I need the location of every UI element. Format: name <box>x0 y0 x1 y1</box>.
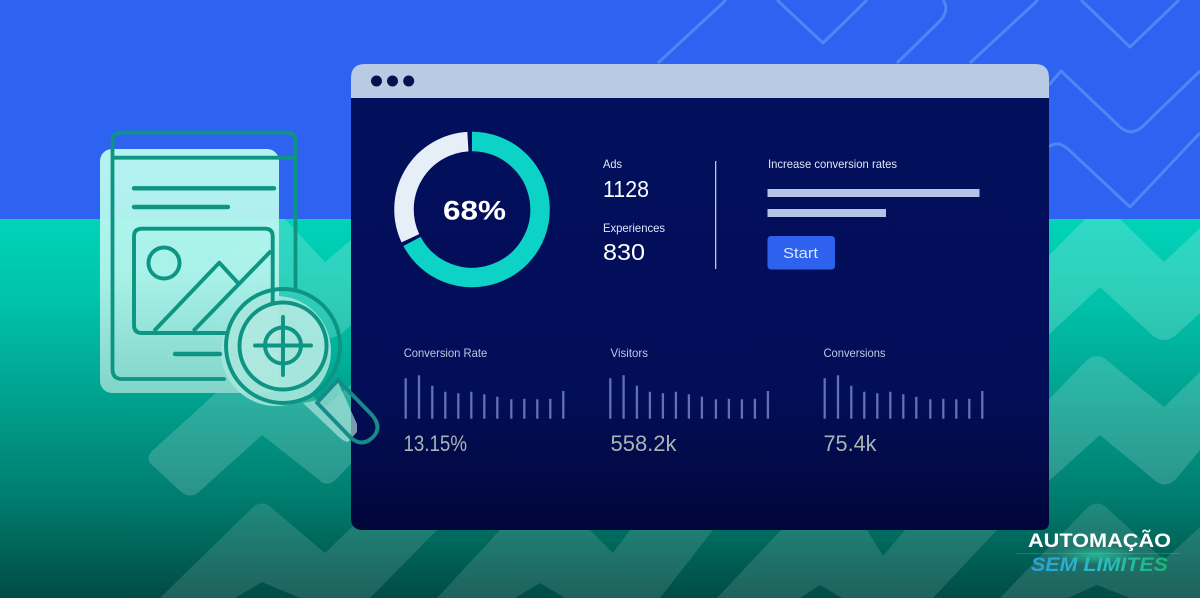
donut chart: 68%: 68% <box>443 196 506 226</box>
document light card <box>100 149 279 393</box>
pattern: teal chevron bands <box>148 219 1200 598</box>
magnifier light backing <box>221 296 331 406</box>
stat: experiences <box>603 221 665 265</box>
window body <box>351 90 1049 530</box>
icon: document with image under magnifier <box>100 132 378 442</box>
background: blue upper half <box>0 0 1200 220</box>
document text lines <box>134 188 274 354</box>
magnifier handle light backing <box>303 380 357 442</box>
window control dots <box>371 76 414 86</box>
stat: ads: Ads <box>603 157 622 171</box>
pattern: blue chevron outlines <box>658 0 1200 207</box>
stat: experiences: Experiences <box>603 221 665 235</box>
magnifier handle <box>317 380 378 442</box>
metric: conversion rate: 13.15% <box>404 431 467 456</box>
window title bar <box>351 64 1049 98</box>
target crosshair <box>255 317 311 375</box>
magnifier <box>226 289 378 442</box>
metric: conversions <box>824 346 982 456</box>
call to action: increase conversion rates: Increase conversion rates <box>768 157 897 171</box>
document outline <box>112 132 296 379</box>
metric: conversion rate: Conversion Rate <box>404 346 487 360</box>
metric: visitors: Visitors <box>610 346 648 360</box>
metric: conversion rate <box>404 346 563 456</box>
button: start <box>768 236 835 270</box>
stat: ads <box>603 157 649 202</box>
call to action: increase conversion rates <box>768 157 980 270</box>
stat: experiences: 830 <box>603 239 645 265</box>
image placeholder <box>134 229 273 333</box>
logo: automação sem limites: SEM LIMITES <box>1031 555 1168 576</box>
logo: automação sem limites <box>1016 530 1180 576</box>
metric: visitors <box>610 346 768 456</box>
background: teal lower half <box>0 219 1200 598</box>
button: start: Start <box>783 246 818 262</box>
panel: browser window <box>351 64 1049 530</box>
metric: conversions: 75.4k <box>824 431 877 456</box>
logo: automação sem limites: AUTOMAÇÃO <box>1028 530 1171 552</box>
stat: ads: 1128 <box>603 176 649 202</box>
metric: visitors: 558.2k <box>610 431 677 456</box>
metric: conversions: Conversions <box>824 346 886 360</box>
donut chart: 68% <box>404 141 540 278</box>
